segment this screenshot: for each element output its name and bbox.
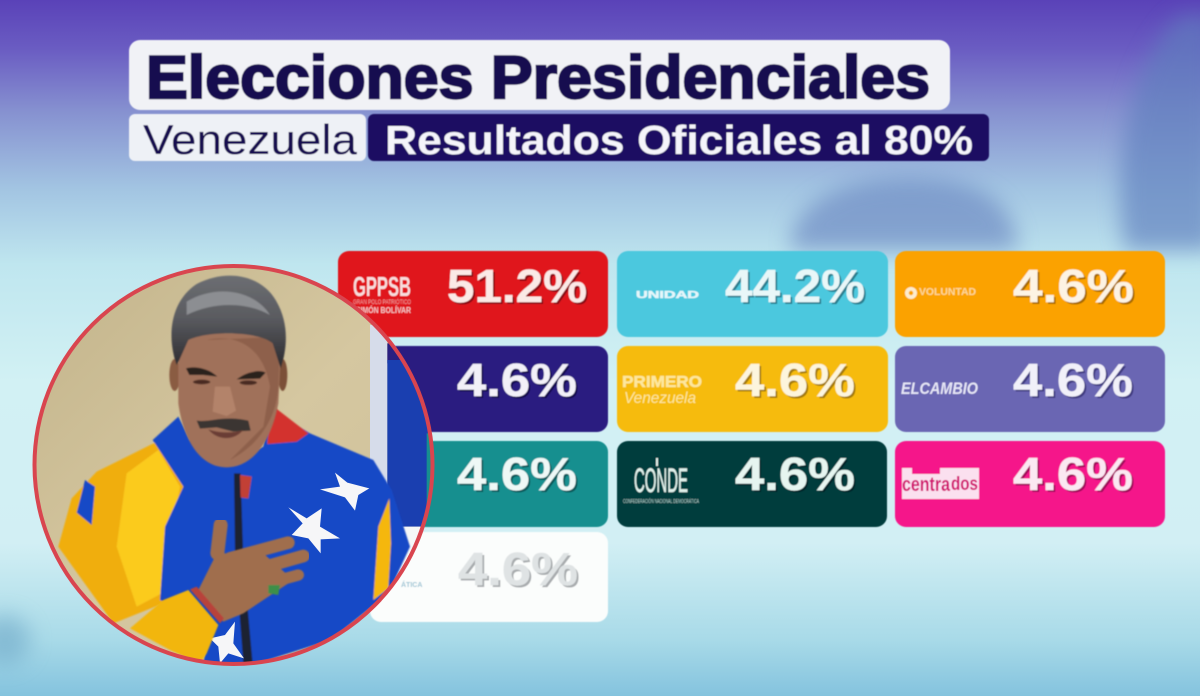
card: Voluntad Popular 4.6% [895, 251, 1165, 337]
card: navy 4.6% [370, 346, 608, 432]
card: Unidad 44.2%: 44.2% [727, 262, 867, 314]
hand over chest [190, 525, 303, 623]
card: Unidad 44.2%: UNIDAD [636, 290, 699, 301]
card: teal 4.6%: 4.6% [457, 448, 577, 500]
portrait photo in a circular red frame [30, 260, 440, 670]
card: Centrados 4.6%: 4.6% [1013, 448, 1133, 500]
beige wall and blurred backdrop [44, 276, 430, 579]
card: Centrados 4.6%: centra [902, 474, 951, 496]
card: Conde 4.6% [617, 441, 887, 527]
card: El Cambio 4.6%: ELCAMBIO [901, 379, 978, 398]
card: El Cambio 4.6%: 4.6% [1015, 356, 1135, 408]
card: white 4.6%: 4.6% [458, 543, 578, 595]
card: Centrados 4.6% [895, 441, 1165, 527]
subtitle: Venezuela: Venezuela [143, 116, 358, 163]
card: Conde 4.6%: CONFEDERACIÓN NACIONAL DEMOCRÁTICA [623, 498, 699, 505]
card: Primero Venezuela 4.6%: Venezuela [624, 390, 696, 407]
card: El Cambio 4.6% [895, 346, 1165, 432]
card: Voluntad Popular 4.6%: 4.6% [1015, 262, 1136, 314]
card: GPPSB 51.2%: 51.2% [449, 262, 589, 314]
title text: Elecciones Presidenciales [146, 44, 930, 111]
card: GPPSB 51.2%: SIMÓN BOLÍVAR [356, 306, 411, 315]
card: Voluntad Popular 4.6%: 4.6% [1013, 260, 1134, 312]
title banner [129, 40, 950, 111]
card: Conde 4.6%: 4.6% [737, 450, 857, 502]
card: teal 4.6% [370, 441, 608, 527]
card: GPPSB 51.2% [338, 251, 608, 337]
card: GPPSB 51.2%: GPPSB [353, 271, 411, 302]
card: GPPSB 51.2%: GRAN POLO PATRIÓTICO [353, 299, 411, 306]
head and face [169, 276, 287, 467]
card: Conde 4.6%: CONDE [634, 462, 688, 500]
card: Voluntad Popular 4.6%: VOLUNTAD [919, 287, 976, 298]
card: white 4.6%: 4.6% [460, 545, 580, 597]
card: Centrados 4.6%: dos [951, 474, 978, 495]
card: Centrados 4.6%: 4.6% [1015, 450, 1135, 502]
yellow cuff [130, 590, 218, 663]
red ring [34, 266, 432, 664]
card: Conde 4.6%: 4.6% [735, 448, 855, 500]
card: teal 4.6%: 4.6% [459, 450, 579, 502]
stars [210, 473, 369, 663]
card: Primero Venezuela 4.6%: 4.6% [735, 354, 855, 406]
card: GPPSB 51.2%: 51.2% [447, 260, 587, 312]
card: white 4.6%: ÁTICA [401, 580, 422, 589]
jacket: yellow sleeve and blue torso [58, 408, 410, 663]
card: Unidad 44.2% [617, 251, 888, 337]
card: navy 4.6%: 4.6% [457, 354, 577, 406]
card: Primero Venezuela 4.6%: PRIMERO [622, 374, 702, 391]
card: Unidad 44.2%: 44.2% [725, 260, 865, 312]
card: navy 4.6%: 4.6% [459, 356, 579, 408]
card: Primero Venezuela 4.6%: 4.6% [737, 356, 857, 408]
card: white 4.6% [370, 532, 608, 622]
card: Primero Venezuela 4.6% [617, 346, 888, 432]
subtitle: official results at 80%: Resultados Oficiales al 80% [385, 117, 973, 163]
card: El Cambio 4.6%: 4.6% [1013, 354, 1133, 406]
